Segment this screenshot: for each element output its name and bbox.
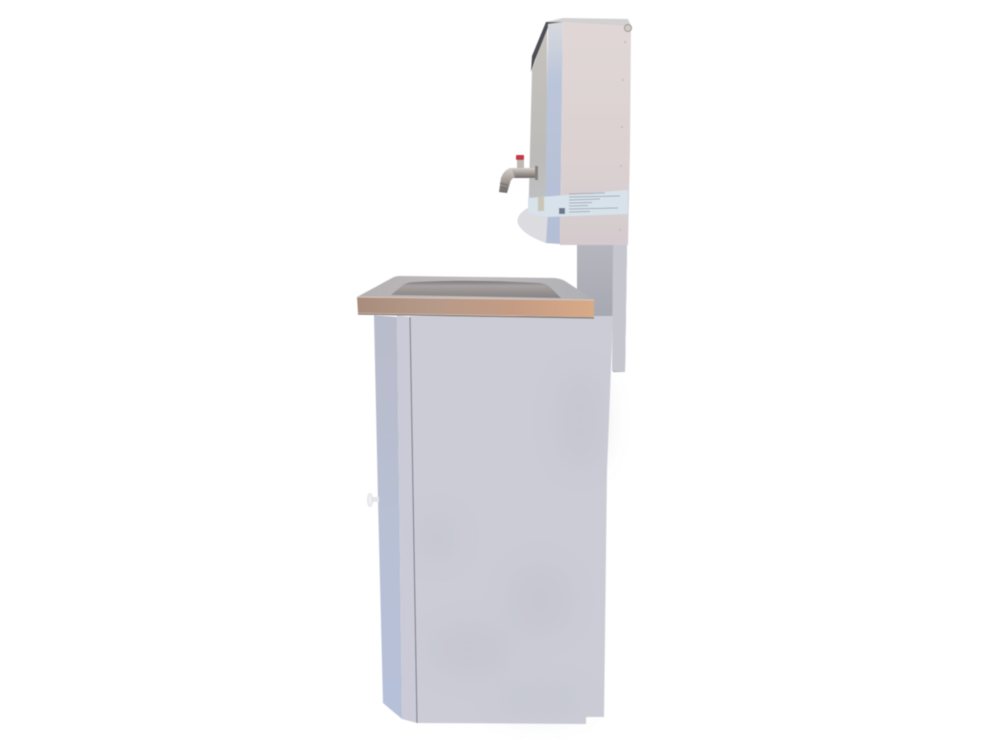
water tap [499, 155, 538, 193]
tank: blue corner strip [545, 22, 563, 244]
water tank [517, 18, 632, 245]
tank: dark lid edge [531, 19, 563, 72]
cabinet: door seam [410, 317, 417, 723]
tap: red handle [516, 155, 524, 160]
door knob [368, 494, 379, 506]
tap: horizontal body [508, 168, 538, 178]
tank: top lid edge [546, 18, 631, 26]
cabinet: left side face [374, 315, 402, 719]
tank: bottom bulge on the left [517, 208, 548, 243]
wash basin [357, 276, 594, 318]
cabinet: door edge strip [397, 315, 417, 723]
tap: threaded nozzle rings [500, 183, 508, 189]
basin: rim top [357, 276, 594, 300]
tank: left grey face [528, 26, 548, 243]
basin: bowl [391, 281, 561, 298]
cabinet: front panel [410, 316, 613, 724]
tank: corner screw [624, 24, 632, 32]
rear support post [577, 245, 627, 372]
tank: main pink face [560, 22, 631, 245]
tank: rivets [619, 41, 626, 231]
tank: adhesive label [528, 190, 628, 217]
tap: spout [499, 168, 515, 193]
basin: copper front edge [357, 297, 594, 317]
cabinet [374, 315, 613, 724]
cabinet: mottled surface [419, 370, 602, 712]
